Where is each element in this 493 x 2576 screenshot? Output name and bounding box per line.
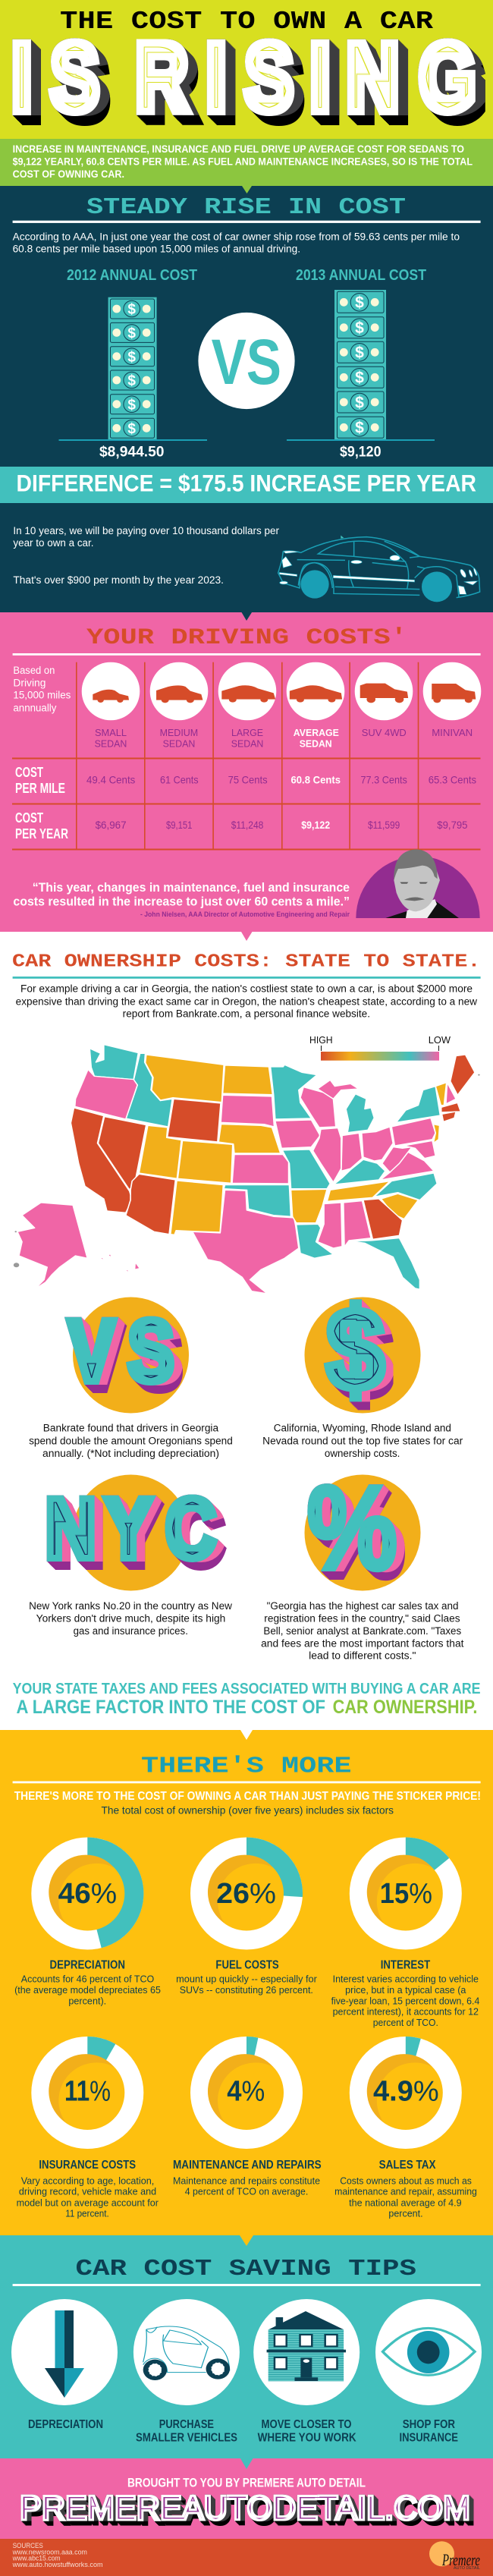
intro text: INCREASE IN MAINTENANCE, INSURANCE AND FUEL DRIVE UP AVERAGE COST FOR SEDANS TO xyxy=(13,143,464,155)
callout: nyc: NYC xyxy=(46,1481,216,1576)
panel: your driving costs xyxy=(0,612,493,932)
callout: percent: and fees are the most important factors that xyxy=(261,1637,464,1649)
table grid xyxy=(12,662,481,850)
basis note xyxy=(13,665,71,713)
panel: header xyxy=(0,0,493,139)
callout: dollar xyxy=(262,1284,463,1459)
donut: maintenance and repairs xyxy=(173,2037,322,2197)
label: 2012 annual cost: 2012 ANNUAL COST xyxy=(67,266,197,284)
heading: THERE'S MORE xyxy=(141,1754,352,1780)
callout: nyc: New York ranks No.20 in the country as New xyxy=(29,1600,232,1612)
donut: interest: percent of TCO. xyxy=(373,2018,438,2028)
donut: interest: Interest varies according to vehicle xyxy=(333,1974,479,1984)
statement: A LARGE FACTOR INTO THE COST OF xyxy=(17,1697,325,1718)
callout: percent: registration fees in the country," said Claes xyxy=(264,1612,460,1624)
paragraph xyxy=(16,983,477,1020)
tip: move closer to where you work: WHERE YOU WORK xyxy=(258,2432,356,2445)
row: cost per year: $9,122 xyxy=(301,819,330,831)
donut: fuel costs: mount up quickly -- especially for xyxy=(176,1974,317,1984)
money stack 2012: $ xyxy=(127,349,136,365)
basis note: Based on xyxy=(13,665,55,676)
logo: AUTO DETAIL xyxy=(454,2566,480,2571)
donut: fuel costs xyxy=(176,1838,317,1996)
row: cost per year: $11,599 xyxy=(368,819,400,831)
donut: insurance costs xyxy=(17,2037,159,2219)
donut: interest: INTEREST xyxy=(381,1959,431,1972)
donut: insurance costs: 11 percent. xyxy=(65,2209,109,2219)
projection text: In 10 years, we will be paying over 10 thousand dollars per xyxy=(13,525,279,536)
money stack 2013: $ xyxy=(355,294,364,312)
donut: maintenance and repairs: MAINTENANCE AND REPAIRS xyxy=(173,2159,322,2172)
vehicle labels xyxy=(95,727,473,750)
label: 2013 annual cost: 2013 ANNUAL COST xyxy=(296,266,426,284)
row: cost per year: PER YEAR xyxy=(15,826,68,841)
portrait xyxy=(356,849,480,918)
callout: nyc: Yorkers don't drive much, despite its high xyxy=(36,1612,225,1624)
vehicle labels: MINIVAN xyxy=(432,727,473,738)
donut: interest: five-year loan, 15 percent down, 6.4 xyxy=(331,1996,479,2006)
paragraph: 60.8 cents per mile based upon 15,000 miles of annual driving. xyxy=(13,244,300,255)
vehicle labels: AVERAGE xyxy=(294,727,339,738)
legend xyxy=(309,1034,451,1061)
heading: CAR COST SAVING TIPS xyxy=(76,2256,416,2282)
callout: percent xyxy=(261,1461,464,1662)
tip: shop for insurance xyxy=(375,2299,482,2445)
intro line: The total cost of ownership (over five years) includes six factors xyxy=(102,1804,394,1816)
icon: car outline xyxy=(278,536,480,602)
tip: purchase smaller vehicles: PURCHASE xyxy=(159,2418,214,2431)
tip: shop for insurance: SHOP FOR xyxy=(403,2418,455,2431)
donut: sales tax: the national average of 4.9 xyxy=(349,2197,462,2208)
donut: insurance costs: Vary according to age, location, xyxy=(21,2175,154,2186)
map of the united states xyxy=(14,1045,480,1294)
row: cost per mile: 49.4 Cents xyxy=(86,774,135,786)
legend: LOW xyxy=(429,1034,451,1046)
icon: down arrow xyxy=(45,2310,84,2398)
donut: maintenance and repairs: Maintenance and repairs constitute xyxy=(173,2175,320,2186)
pointer xyxy=(242,186,252,193)
tip: depreciation xyxy=(11,2299,118,2431)
vehicle labels: MEDIUM xyxy=(160,727,198,738)
sources: www.auto.howstuffworks.com xyxy=(12,2561,103,2568)
callout: nyc: gas and insurance prices. xyxy=(74,1625,188,1637)
title: is rising: IS RISING xyxy=(11,24,476,131)
donut: sales tax: SALES TAX xyxy=(379,2159,436,2172)
logo xyxy=(429,2541,480,2571)
donut: interest: percent interest), it accounts for 12 xyxy=(333,2007,479,2018)
intro text: $9,122 YEARLY, 60.8 CENTS PER MILE. AS FUEL AND MAINTENANCE INCREASES, SO IS THE TOTAL xyxy=(13,156,473,168)
donut: depreciation xyxy=(14,1837,161,2006)
donut: insurance costs: INSURANCE COSTS xyxy=(39,2159,136,2172)
sponsor line: BROUGHT TO YOU BY PREMERE AUTO DETAIL xyxy=(127,2476,366,2490)
tip: shop for insurance: INSURANCE xyxy=(399,2432,458,2445)
money stack 2013: $ xyxy=(355,344,364,362)
panel: state to state xyxy=(0,932,493,1730)
heading: CAR OWNERSHIP COSTS: STATE TO STATE. xyxy=(12,951,481,972)
quote xyxy=(13,881,350,918)
tip: purchase smaller vehicles xyxy=(133,2299,240,2445)
tip: depreciation: DEPRECIATION xyxy=(28,2418,103,2431)
panel: footer xyxy=(0,2539,493,2576)
row: cost per year: $11,248 xyxy=(231,819,264,831)
heading: STEADY RISE IN COST xyxy=(86,194,406,221)
money stack 2013: $ xyxy=(355,370,364,387)
sources: SOURCES xyxy=(13,2542,43,2549)
money stack 2012: $ xyxy=(127,421,136,437)
statement xyxy=(13,1680,481,1718)
callout: percent: "Georgia has the highest car sales tax and xyxy=(267,1600,458,1612)
donut: interest: 15% xyxy=(380,1878,432,1910)
money stack 2012: $ xyxy=(127,373,136,389)
vehicle labels: SEDAN xyxy=(300,738,332,750)
callout: vs: spend double the amount Oregonians spend xyxy=(29,1435,233,1446)
vehicle labels: SMALL xyxy=(95,727,127,738)
heading: YOUR DRIVING COSTS' xyxy=(86,625,407,651)
callout: vs: Bankrate found that drivers in Georgia xyxy=(43,1423,219,1434)
row: cost per mile: 75 Cents xyxy=(228,774,268,786)
quote: costs resulted in the increase to just over 60 cents a mile.” xyxy=(13,895,350,908)
basis note: 15,000 miles xyxy=(13,690,71,701)
paragraph: For example driving a car in Georgia, the nation's costliest state to own a car, is about $2000 more xyxy=(20,983,473,995)
intro text xyxy=(13,143,473,180)
sources: www.abc15.com xyxy=(12,2555,61,2562)
money stack 2012: $ xyxy=(127,302,136,318)
vehicle labels: LARGE xyxy=(231,727,263,738)
pointer xyxy=(240,2458,253,2469)
donut: depreciation: (the average model depreciates 65 xyxy=(14,1985,161,1996)
donut: sales tax: percent. xyxy=(388,2209,423,2219)
pointer xyxy=(241,932,252,941)
tip: move closer to where you work xyxy=(253,2299,360,2445)
paragraph: report from Bankrate.com, a personal finance website. xyxy=(123,1008,370,1020)
donut: insurance costs: 11% xyxy=(64,2075,111,2107)
row: cost per year: $9,795 xyxy=(437,819,468,831)
row: cost per mile: 65.3 Cents xyxy=(429,774,476,786)
panel: there's more xyxy=(0,1730,493,2235)
quote: - John Nielsen, AAA Director of Automotive Engineering and Repair xyxy=(140,911,350,918)
projection text: That's over $900 per month by the year 2023. xyxy=(13,574,224,586)
legend: HIGH xyxy=(309,1034,333,1046)
icon: house xyxy=(267,2311,346,2381)
donut: fuel costs: SUVs -- constituting 26 percent. xyxy=(180,1985,313,1996)
donut: depreciation: DEPRECIATION xyxy=(50,1959,125,1972)
donut: sales tax xyxy=(334,2037,477,2219)
website: PREMEREAUTODETAIL.COM xyxy=(20,2490,470,2527)
vs badge: VS xyxy=(212,326,281,398)
row: cost per year: COST xyxy=(15,810,43,826)
row: cost per mile: PER MILE xyxy=(15,781,65,796)
row: cost per mile: 60.8 Cents xyxy=(291,774,341,786)
tip: purchase smaller vehicles: SMALLER VEHICLES xyxy=(136,2432,237,2445)
basis note: annnually xyxy=(13,702,57,713)
quote: “This year, changes in maintenance, fuel and insurance xyxy=(33,881,350,895)
donut: maintenance and repairs: 4 percent of TCO on average. xyxy=(185,2187,308,2197)
sources: www.newsroom.aaa.com xyxy=(12,2549,87,2556)
donut: interest xyxy=(331,1838,479,2028)
intro text: COST OF OWNING CAR. xyxy=(13,168,124,180)
donut: interest: price, but in a typical case (a xyxy=(345,1985,466,1996)
donut: fuel costs: 26% xyxy=(216,1878,276,1910)
callout: percent: % xyxy=(307,1461,397,1595)
donut: maintenance and repairs: 4% xyxy=(227,2075,265,2107)
callout: percent: lead to different costs." xyxy=(309,1650,416,1662)
money stack 2013: $ xyxy=(355,394,364,411)
pointer xyxy=(241,612,252,621)
money stack 2013 xyxy=(334,290,386,439)
pointer xyxy=(240,2235,253,2246)
vehicle labels: SEDAN xyxy=(95,738,127,750)
amount 2012: $8,944.50 xyxy=(99,444,165,461)
donut: sales tax: maintenance and repair, assuming xyxy=(334,2187,477,2197)
paragraph: expensive than driving the exact same car in Oregon, the nation's cheapest state, according to a new xyxy=(16,995,477,1007)
row: cost per mile: 77.3 Cents xyxy=(361,774,407,786)
panel: intro xyxy=(0,139,493,186)
paragraph: According to AAA, In just one year the cost of car owner ship rose from of 59.63 cents per mile to xyxy=(13,231,460,243)
vehicle icons xyxy=(82,662,481,720)
projection text: year to own a car. xyxy=(13,537,93,549)
vehicle labels: SEDAN xyxy=(231,738,263,750)
donut: insurance costs: driving record, vehicle make and xyxy=(19,2187,156,2197)
pointer xyxy=(240,1730,253,1740)
vehicle labels: SEDAN xyxy=(163,738,195,750)
donut: depreciation: percent). xyxy=(68,1996,106,2006)
callout: dollar: California, Wyoming, Rhode Island and xyxy=(274,1423,451,1434)
amount 2013: $9,120 xyxy=(340,444,382,461)
panel: car cost saving tips xyxy=(0,2235,493,2458)
icon: eye xyxy=(383,2328,475,2375)
donut: depreciation: Accounts for 46 percent of TCO xyxy=(21,1974,154,1984)
callout: percent: Bell, senior analyst at Bankrate.com. "Taxes xyxy=(263,1625,461,1637)
icon: small car xyxy=(143,2326,230,2380)
callout: vs: annually. (*Not including depreciation) xyxy=(42,1448,219,1459)
projection text xyxy=(13,525,279,586)
callout: vs xyxy=(29,1297,233,1459)
panel: brought to you by xyxy=(0,2458,493,2539)
money stack 2012: $ xyxy=(127,397,136,413)
vs badge xyxy=(198,313,295,409)
row: cost per mile xyxy=(15,765,476,796)
panel: steady rise in cost xyxy=(0,186,493,612)
money stack 2013: $ xyxy=(355,319,364,337)
money stack 2012 xyxy=(108,297,157,439)
tip: move closer to where you work: MOVE CLOSER TO xyxy=(261,2418,352,2431)
row: cost per mile: COST xyxy=(15,765,43,780)
row: cost per year: $9,151 xyxy=(166,819,193,831)
donut: insurance costs: model but on average account for xyxy=(17,2197,159,2208)
vehicle labels: SUV 4WD xyxy=(362,727,407,738)
money stack 2013: $ xyxy=(355,420,364,437)
donut: fuel costs: FUEL COSTS xyxy=(215,1959,279,1972)
donut: sales tax: 4.9% xyxy=(373,2075,439,2107)
paragraph xyxy=(13,231,460,255)
sources xyxy=(12,2542,103,2568)
basis note: Driving xyxy=(13,677,46,688)
callout: dollar: ownership costs. xyxy=(325,1448,400,1459)
money stack 2012: $ xyxy=(127,326,136,341)
row: cost per year: $6,967 xyxy=(96,819,127,831)
row: cost per mile: 61 Cents xyxy=(160,774,199,786)
callout: dollar: Nevada round out the top five states for car xyxy=(262,1435,463,1446)
callout: nyc xyxy=(29,1475,232,1637)
callout: vs: VS xyxy=(68,1303,174,1400)
title line: THE COST TO OWN A CAR xyxy=(60,8,433,36)
callout: dollar: $ xyxy=(326,1284,385,1414)
donut: sales tax: Costs owners about as much as xyxy=(340,2175,472,2186)
row: cost per year xyxy=(15,810,468,841)
donut: depreciation: 46% xyxy=(58,1878,117,1910)
